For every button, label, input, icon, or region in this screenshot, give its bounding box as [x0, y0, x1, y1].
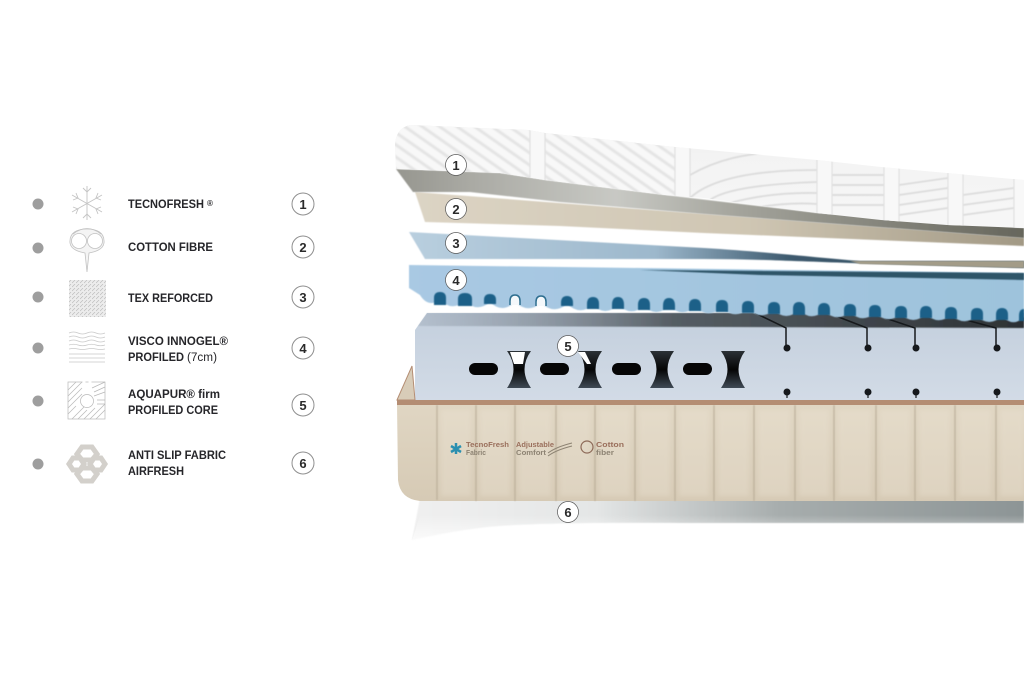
left legend	[32, 186, 314, 481]
legend row 5: Aquapur core: 5	[299, 398, 307, 413]
quilted channels	[437, 405, 996, 501]
legend row 3: Tex reforced: TEX REFORCED	[128, 293, 213, 305]
embroidered labels: fiber	[596, 448, 614, 457]
core slots	[469, 363, 712, 375]
layer 4: visco innogel	[409, 265, 1024, 322]
icon: snowflake	[72, 186, 102, 220]
mattress base cover	[397, 366, 1024, 501]
layer 2: cotton fibre	[415, 192, 1024, 246]
legend row 4: Visco Innogel: (7cm)	[187, 352, 217, 364]
legend row 1: Tecnofresh: 1	[299, 197, 307, 212]
legend row 1: Tecnofresh: ®	[207, 199, 213, 208]
number badges	[446, 154, 578, 522]
icon: cotton boll	[70, 228, 104, 272]
legend row 6: Anti slip fabric	[32, 447, 314, 481]
number badges: 1	[452, 158, 460, 173]
core pin holes	[755, 313, 1000, 398]
mattress exploded diagram	[390, 120, 1024, 541]
number badges: 6	[564, 505, 572, 520]
legend row 4: Visco Innogel: 4	[299, 341, 307, 356]
infographic canvas	[32, 125, 1024, 538]
legend row 4: Visco Innogel: VISCO INNOGEL®	[128, 336, 229, 348]
profile notches	[434, 292, 1024, 321]
light arches on the left teeth	[510, 295, 546, 306]
legend row 1: Tecnofresh	[32, 186, 314, 220]
legend row 5: Aquapur core	[32, 381, 314, 419]
core hourglass cut-outs	[507, 351, 745, 388]
embroidered labels: Fabric	[466, 448, 486, 457]
embroidered labels: Comfort	[516, 448, 547, 457]
diagonal quilting	[395, 125, 530, 178]
layer 1: gray foam side	[396, 169, 1024, 238]
legend row 6: Anti slip fabric: 6	[299, 456, 307, 471]
legend row 6: Anti slip fabric: AIRFRESH	[128, 466, 184, 478]
layer 3: tex reforced	[409, 232, 1024, 268]
legend row 5: Aquapur core: AQUAPUR® firm	[128, 389, 220, 401]
legend row 5: Aquapur core: PROFILED CORE	[128, 405, 218, 417]
icon: hexagon clover	[69, 447, 105, 481]
icon: woven texture	[69, 280, 106, 317]
legend row 4: Visco Innogel: PROFILED	[128, 352, 184, 364]
legend row 4: Visco Innogel	[32, 332, 314, 364]
legend row 1: Tecnofresh: TECNOFRESH	[128, 199, 204, 211]
legend row 3: Tex reforced	[32, 280, 314, 317]
layer 1: tecnofresh quilted top	[395, 125, 1024, 228]
legend row 3: Tex reforced: 3	[299, 290, 307, 305]
icon: firm core	[68, 381, 105, 419]
embroidered labels: Adjustable	[516, 440, 554, 449]
layer 5: profiled core	[415, 313, 1024, 400]
embroidered labels: Cotton	[596, 440, 624, 449]
number badges: 3	[452, 236, 460, 251]
legend row 2: Cotton fibre: 2	[299, 240, 307, 255]
embroidered labels: TecnoFresh	[466, 440, 509, 449]
layer 6: anti slip fabric	[412, 498, 1024, 541]
number badges: 5	[564, 339, 572, 354]
legend row 6: Anti slip fabric: ANTI SLIP FABRIC	[128, 450, 226, 462]
legend row 2: Cotton fibre: COTTON FIBRE	[128, 242, 213, 254]
number badges: 2	[452, 202, 460, 217]
number badges: 4	[452, 273, 460, 288]
icon: wave lines	[69, 332, 105, 362]
legend row 2: Cotton fibre	[32, 228, 314, 272]
embroidered labels	[451, 440, 624, 457]
